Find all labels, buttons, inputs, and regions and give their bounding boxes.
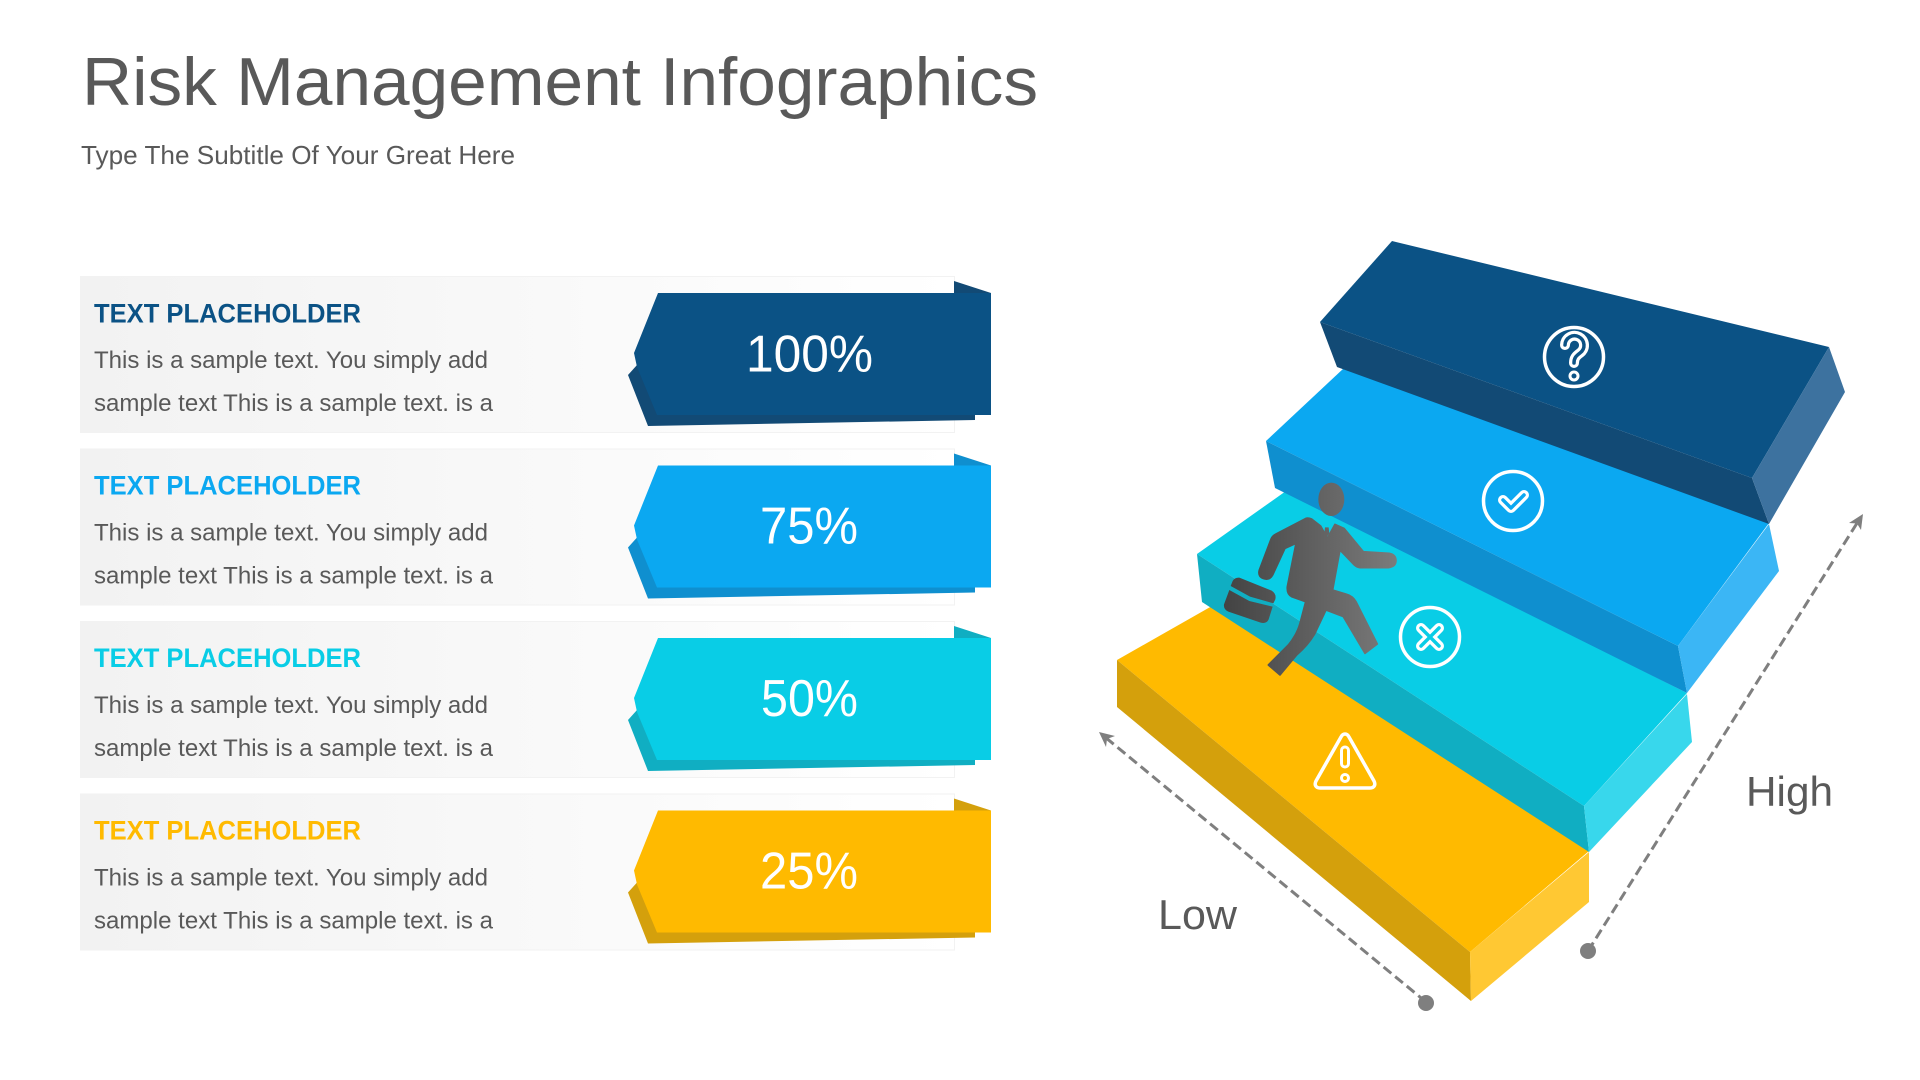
row body text (94, 347, 494, 417)
ribbon face (634, 638, 991, 760)
row body text (94, 692, 494, 762)
row body text (94, 864, 494, 934)
row body text: sample text This is a sample text. is a (94, 390, 494, 417)
percentage value: 50% (761, 670, 858, 728)
ribbon shadow (954, 454, 991, 466)
row body text: This is a sample text. You simply add (94, 692, 488, 719)
panel background (80, 276, 954, 432)
ribbon face (634, 466, 991, 588)
ribbon underside (628, 538, 975, 598)
stair: navy step (1320, 241, 1845, 524)
panel: row 25% (80, 794, 991, 950)
percentage value: 75% (760, 498, 858, 556)
briefcase (1224, 578, 1276, 623)
stair: teal step (1197, 491, 1692, 852)
label: High: High (1746, 768, 1833, 815)
icon: question mark (1544, 328, 1604, 386)
row heading: TEXT PLACEHOLDER (94, 470, 361, 500)
subtitle: Type The Subtitle Of Your Great Here (81, 140, 515, 170)
ribbon underside (628, 882, 975, 944)
ribbon underside (628, 710, 975, 771)
row body text: sample text This is a sample text. is a (94, 562, 494, 590)
arrow: low axis (1099, 732, 1434, 1011)
row body text: This is a sample text. You simply add (94, 864, 488, 892)
percentage value: 25% (760, 842, 858, 900)
ribbon underside (628, 365, 975, 426)
ribbon shadow (954, 281, 991, 293)
ribbon shadow (954, 626, 991, 638)
figure: running businessman (1224, 483, 1396, 675)
panel background (80, 794, 954, 950)
icon: warning triangle (1315, 734, 1375, 788)
row body text: sample text This is a sample text. is a (94, 735, 494, 762)
row body text: This is a sample text. You simply add (94, 347, 488, 374)
body (1259, 518, 1396, 675)
panel background (80, 449, 954, 605)
icon: cross mark (1400, 608, 1460, 666)
tie (1324, 527, 1329, 537)
stair: blue step (1266, 368, 1779, 693)
ribbon face (634, 293, 991, 415)
row heading: TEXT PLACEHOLDER (94, 643, 361, 673)
stair: yellow step (1117, 606, 1589, 1001)
panel: row 75% (80, 449, 991, 605)
ribbon shadow (954, 798, 991, 810)
row body text: sample text This is a sample text. is a (94, 908, 494, 934)
arrow: high axis (1580, 514, 1863, 959)
icon: check mark (1484, 472, 1542, 530)
percentage value: 100% (746, 326, 873, 384)
row heading: TEXT PLACEHOLDER (94, 298, 361, 328)
row heading: TEXT PLACEHOLDER (94, 816, 361, 846)
label: Low: Low (1158, 891, 1238, 938)
head (1318, 483, 1344, 516)
row body text: This is a sample text. You simply add (94, 520, 488, 546)
panel: row 50% (80, 622, 991, 778)
panel background (80, 622, 954, 778)
ribbon face (634, 810, 991, 932)
row body text (94, 520, 494, 590)
panel: row 100% (80, 276, 991, 432)
title: Risk Management Infographics (82, 44, 1038, 120)
